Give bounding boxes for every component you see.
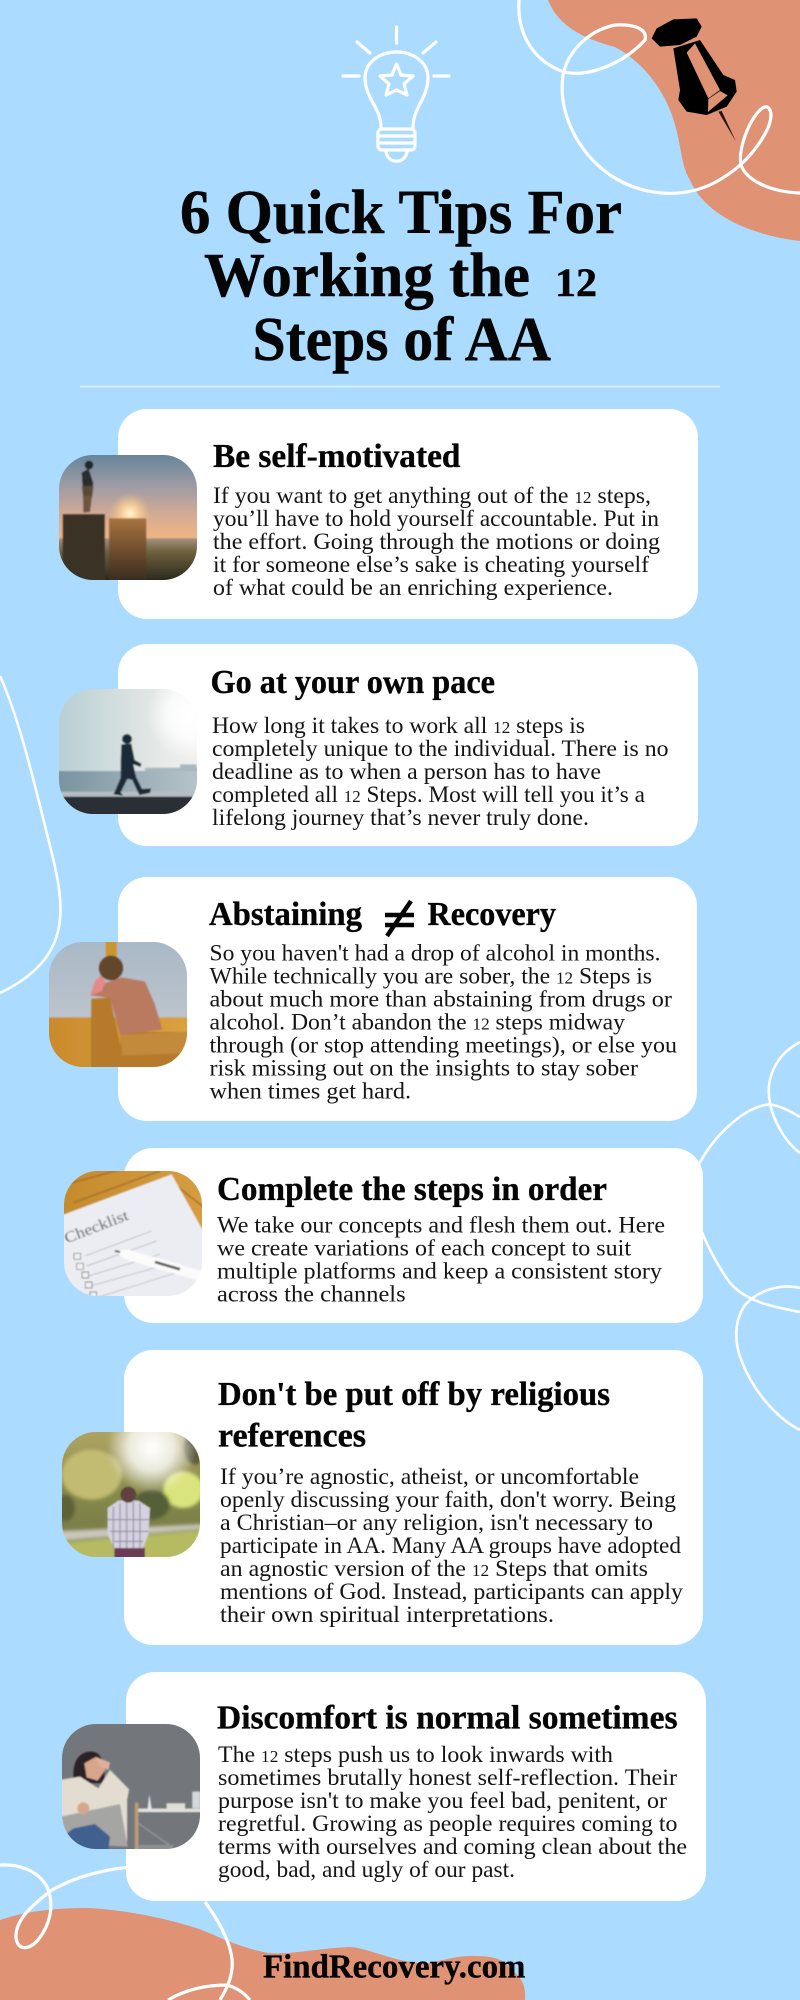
title: 6 Quick Tips For bbox=[180, 179, 622, 247]
white scribble: right middle bbox=[692, 1105, 800, 1312]
body text: purpose isn't to make you feel bad, penitent, or bbox=[218, 1788, 667, 1814]
body text: across the channels bbox=[217, 1282, 406, 1308]
body text bbox=[212, 713, 668, 831]
body text: about much more than abstaining from drugs or bbox=[210, 987, 672, 1013]
body text: lifelong journey that’s never truly done. bbox=[212, 805, 589, 831]
heading: Discomfort is normal sometimes bbox=[217, 1700, 678, 1736]
title: 12 bbox=[555, 260, 597, 305]
icon: not-equal sign bbox=[385, 901, 414, 936]
body text: deadline as to when a person has to have bbox=[212, 759, 601, 785]
body text: The 12 steps push us to look inwards with bbox=[218, 1742, 613, 1768]
bottom-left coral blob bbox=[0, 1908, 525, 2000]
body text: an agnostic version of the 12 Steps that omits bbox=[220, 1556, 648, 1582]
body text bbox=[210, 941, 677, 1105]
panel: complete the steps in order bbox=[60, 1148, 703, 1323]
heading: Go at your own pace bbox=[210, 664, 495, 701]
heading: Complete the steps in order bbox=[217, 1171, 607, 1208]
panel: religious references: references bbox=[218, 1418, 366, 1454]
white scribble: top right bbox=[519, 0, 800, 193]
panel: be self-motivated bbox=[50, 409, 698, 619]
body text: sometimes brutally honest self-reflection. Their bbox=[218, 1765, 677, 1791]
body text: participate in AA. Many AA groups have adopted bbox=[220, 1533, 681, 1559]
body text: If you want to get anything out of the 12 steps, bbox=[213, 483, 651, 509]
photo: man on pillar at sunset bbox=[59, 455, 197, 580]
title: Working the bbox=[204, 242, 530, 310]
body text: good, bad, and ugly of our past. bbox=[218, 1857, 515, 1883]
title bbox=[180, 179, 622, 374]
body text: So you haven't had a drop of alcohol in months. bbox=[210, 941, 660, 967]
body text: regretful. Growing as people requires coming to bbox=[218, 1811, 678, 1837]
title: Steps of AA bbox=[252, 306, 551, 374]
body text: completely unique to the individual. There is no bbox=[212, 736, 668, 762]
body text: when times get hard. bbox=[210, 1079, 411, 1105]
panel: go at your own pace bbox=[50, 644, 698, 846]
body text: risk missing out on the insights to stay sober bbox=[210, 1056, 638, 1082]
body text: While technically you are sober, the 12 Steps is bbox=[210, 964, 652, 990]
body text bbox=[217, 1213, 665, 1308]
photo: man praying in sunlight bbox=[62, 1432, 200, 1557]
body text: through (or stop attending meetings), or else you bbox=[210, 1033, 677, 1059]
photo: person seated on sofa by a window bbox=[49, 942, 187, 1067]
body text: We take our concepts and flesh them out. Here bbox=[217, 1213, 665, 1239]
icon: light bulb with star bbox=[343, 27, 449, 161]
body text: multiple platforms and keep a consistent story bbox=[217, 1259, 662, 1285]
photo: checklist on a wooden desk bbox=[64, 1171, 202, 1296]
body text: it for someone else’s sake is cheating yourself bbox=[213, 552, 649, 578]
panel: abstaining is not recovery bbox=[45, 877, 697, 1121]
top-right coral blob bbox=[548, 0, 800, 241]
white scribble: bottom left bbox=[0, 1865, 130, 1948]
panel: discomfort is normal sometimes bbox=[55, 1672, 706, 1901]
white scribble: right upper bbox=[769, 1042, 800, 1153]
photo: person walking by the sea bbox=[59, 689, 197, 814]
white scribble: right lower bbox=[736, 1287, 800, 1430]
body text: you’ll have to hold yourself accountable. Put in bbox=[213, 506, 659, 532]
heading: Be self-motivated bbox=[213, 438, 461, 475]
body text: of what could be an enriching experience. bbox=[213, 575, 613, 601]
icon: push pin bbox=[652, 18, 737, 142]
body text: openly discussing your faith, don't worry. Being bbox=[220, 1487, 676, 1513]
photo: checklist on a wooden desk: Checklist bbox=[62, 1207, 132, 1247]
body text: If you’re agnostic, atheist, or uncomfortable bbox=[220, 1464, 639, 1490]
body text: completed all 12 Steps. Most will tell you it’s a bbox=[212, 782, 646, 808]
body text: alcohol. Don’t abandon the 12 steps midway bbox=[210, 1010, 625, 1036]
body text: mentions of God. Instead, participants can apply bbox=[220, 1579, 683, 1605]
heading: Don't be put off by religious bbox=[218, 1376, 610, 1413]
body text bbox=[220, 1464, 683, 1628]
body text: their own spiritual interpretations. bbox=[220, 1602, 554, 1628]
body text: How long it takes to work all 12 steps is bbox=[212, 713, 585, 739]
white scribble: bottom centre bbox=[168, 1902, 250, 2000]
body text: a Christian–or any religion, isn't necessary to bbox=[220, 1510, 653, 1536]
photo: distressed woman on a chair bbox=[62, 1724, 200, 1849]
white scribble: left bbox=[0, 676, 60, 993]
body text bbox=[218, 1742, 687, 1883]
body text: terms with ourselves and coming clean about the bbox=[218, 1834, 687, 1860]
body text bbox=[213, 483, 660, 601]
heading: Abstaining bbox=[209, 896, 362, 933]
footer: site name: FindRecovery.com bbox=[263, 1949, 526, 1986]
body text: we create variations of each concept to suit bbox=[217, 1236, 631, 1262]
panel: religious references bbox=[55, 1350, 703, 1645]
heading continued: Recovery bbox=[428, 896, 556, 933]
body text: the effort. Going through the motions or doing bbox=[213, 529, 660, 555]
